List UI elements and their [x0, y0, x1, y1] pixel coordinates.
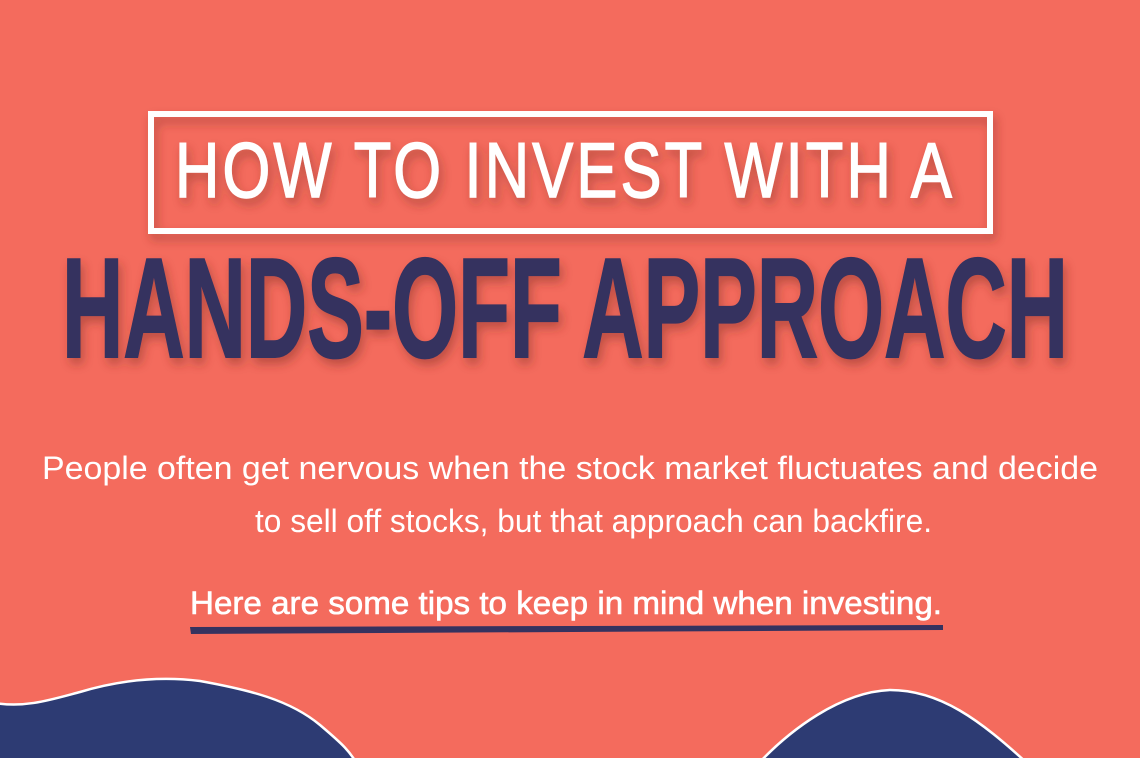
intro paragraph: People often get nervous when the stock market fluctuates and decide — [42, 450, 1098, 486]
wave right — [758, 690, 1028, 758]
intro paragraph: to sell off stocks, but that approach can backfire. — [255, 503, 932, 539]
wave left — [0, 679, 360, 758]
tips line with underline: Here are some tips to keep in mind when investing. — [190, 585, 942, 621]
intro paragraph — [42, 450, 1098, 539]
title line 1: HOW TO INVEST WITH A — [175, 126, 955, 214]
title box — [151, 114, 990, 231]
